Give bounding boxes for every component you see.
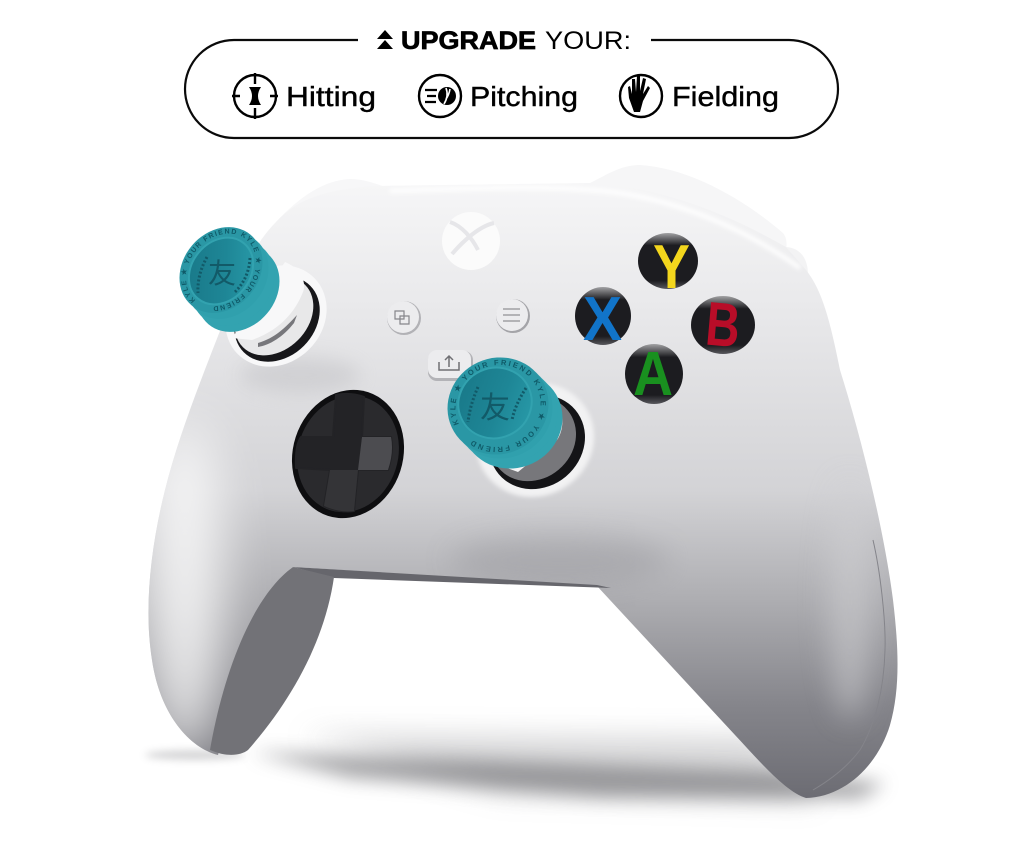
heading: UPGRADE: [401, 27, 536, 55]
face button X: X: [583, 285, 622, 354]
right side stub: [786, 247, 808, 275]
left thumbstick: [180, 227, 326, 367]
pill outline: [185, 40, 838, 138]
floor shadow: [145, 735, 885, 800]
teal cap: KYLE ★ YOUR FRIEND KYLE ★ YOUR FRIEND: [450, 360, 546, 452]
face button Y: Y: [653, 233, 690, 302]
icon: pitching: [419, 75, 461, 117]
left bumper: [276, 179, 395, 222]
face button A: A: [633, 340, 673, 409]
label: pitching: Pitching: [470, 81, 578, 112]
infographic: controller upgrade: [146, 30, 898, 814]
underside strip: [293, 567, 611, 588]
body shading: [147, 188, 885, 790]
teal cap: KYLE ★ YOUR FRIEND KYLE ★ YOUR FRIEND: [181, 228, 262, 311]
stick stem: [232, 262, 304, 340]
view button: [387, 301, 421, 335]
teal cap: [180, 227, 280, 332]
icon: double chevron: [377, 30, 393, 49]
controller: [148, 165, 898, 798]
icon: hitting: [232, 73, 278, 119]
share button: [428, 350, 473, 381]
stick socket: [205, 245, 347, 387]
face button Y: [638, 233, 698, 302]
teal cap: 友: [208, 258, 236, 289]
d-pad: [276, 375, 420, 533]
badge: upgrade your: [185, 27, 838, 138]
right thumbstick: [448, 358, 595, 498]
face button B: B: [703, 290, 743, 361]
foam slot: [258, 315, 297, 347]
label: fielding: Fielding: [672, 81, 779, 112]
left grip panel: [210, 567, 334, 755]
icon: fielding glove: [620, 75, 662, 117]
teal cap: 友: [480, 392, 510, 425]
xbox logo: [442, 212, 500, 270]
right bumper: [590, 165, 787, 250]
controller body: [148, 183, 898, 798]
heading suffix: YOUR:: [545, 27, 631, 55]
stick socket: [455, 362, 615, 518]
label: hitting: Hitting: [286, 81, 376, 112]
stick stem: [490, 400, 562, 472]
menu button: [496, 299, 530, 333]
